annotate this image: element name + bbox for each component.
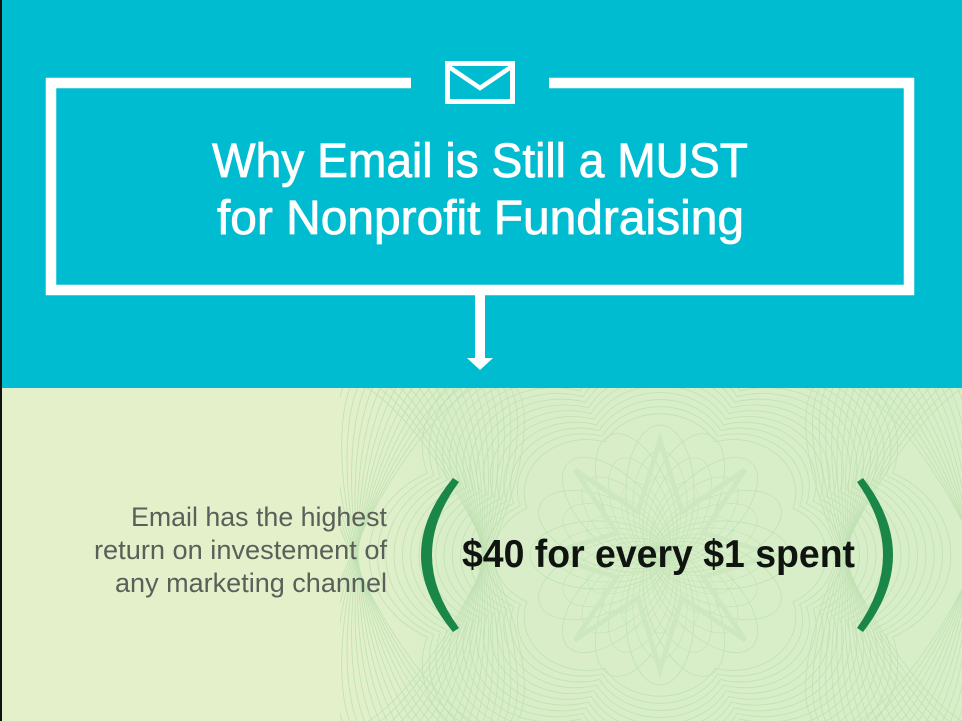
arrow <box>467 295 493 370</box>
right bracket <box>857 478 893 632</box>
title <box>212 135 748 245</box>
panel: pale green background <box>2 388 962 721</box>
text block: email return on investment: Email has the highest <box>131 502 387 532</box>
teal header background <box>0 0 962 388</box>
text block: email return on investment: return on investement of <box>94 535 387 565</box>
left edge strip <box>0 0 2 721</box>
text block: email return on investment: any marketing channel <box>115 568 387 598</box>
text block: email return on investment <box>94 502 387 598</box>
icon: envelope <box>448 64 512 102</box>
left bracket <box>421 478 459 632</box>
guilloche background pattern <box>340 388 962 721</box>
title frame <box>51 83 909 290</box>
key statistic: $40 for every $1 spent <box>462 533 855 576</box>
title: for Nonprofit Fundraising <box>217 192 744 245</box>
title: Why Email is Still a MUST <box>212 135 748 188</box>
